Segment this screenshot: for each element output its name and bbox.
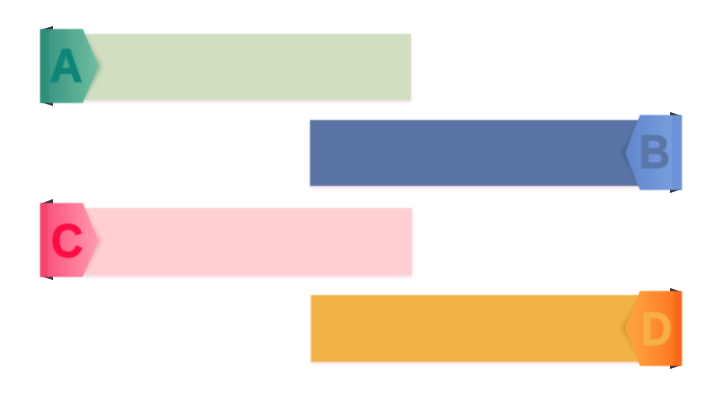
panel: D xyxy=(311,288,682,369)
panel: B xyxy=(310,112,682,193)
bar A xyxy=(85,34,411,102)
letter B: B xyxy=(639,125,670,178)
fold marks B xyxy=(670,112,682,193)
panel: A xyxy=(40,26,411,106)
letter D: D xyxy=(641,302,672,355)
bar D xyxy=(311,295,640,364)
bar C xyxy=(85,208,412,277)
fold marks A xyxy=(40,26,53,106)
bar B xyxy=(310,120,640,188)
tab C xyxy=(40,203,98,277)
tab shadow D xyxy=(622,295,642,362)
tab shadow A xyxy=(83,34,101,100)
fold marks C xyxy=(40,199,53,280)
fold marks D xyxy=(670,288,682,369)
tab B xyxy=(625,115,682,190)
tab D xyxy=(625,291,682,366)
panel: C xyxy=(40,199,412,280)
tab shadow C xyxy=(83,208,101,275)
letter C: C xyxy=(51,214,83,267)
tab shadow B xyxy=(622,120,642,186)
tab A xyxy=(40,29,98,103)
letter A: A xyxy=(50,39,82,92)
